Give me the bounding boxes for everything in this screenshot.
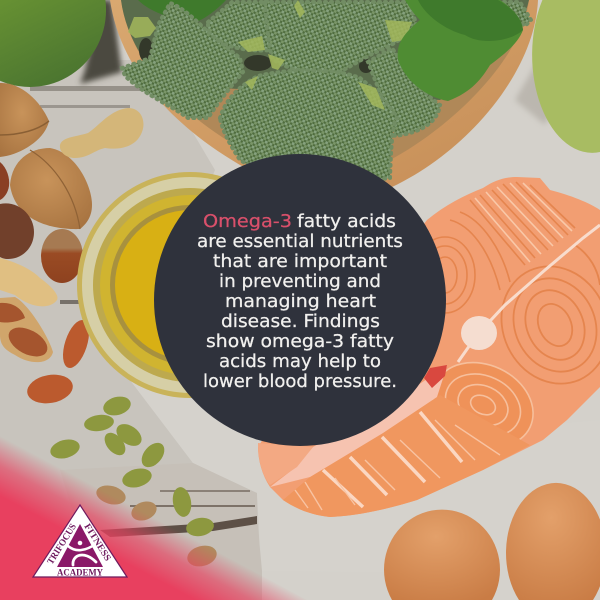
bowl of olive oil bbox=[77, 172, 303, 398]
callout text: are essential nutrients bbox=[197, 231, 403, 252]
callout text: Omega-3 bbox=[203, 211, 292, 232]
spinach leaf highlight bbox=[418, 0, 523, 41]
circle background bbox=[154, 154, 446, 446]
hazelnut bbox=[41, 229, 83, 283]
salmon body bbox=[258, 177, 600, 517]
callout text: managing heart bbox=[225, 291, 376, 312]
broccoli floret: left bbox=[122, 3, 243, 118]
callout text: that are important bbox=[213, 251, 387, 272]
salmon steak bbox=[258, 177, 600, 517]
salmon top muscle stripes bbox=[415, 182, 575, 313]
logo figure bbox=[68, 541, 97, 565]
logo text: ACADEMY: ACADEMY bbox=[57, 568, 103, 578]
logo text: TRIFOCUS: TRIFOCUS bbox=[46, 522, 79, 567]
olive oil bbox=[115, 210, 265, 360]
spinach leaf: right bbox=[398, 0, 523, 101]
logo: Trifocus Fitness Academy bbox=[33, 505, 127, 578]
logo triangle bbox=[33, 505, 127, 577]
walnut: top left bbox=[0, 83, 49, 157]
pumpkin seeds bbox=[48, 394, 219, 570]
callout text: fatty acids bbox=[297, 211, 396, 232]
open peanut shell bbox=[0, 297, 53, 362]
salmon right muscle swirls bbox=[483, 245, 600, 401]
logo inner triangle bbox=[57, 524, 103, 567]
logo text: FITNESS: FITNESS bbox=[81, 522, 112, 563]
callout text: acids may help to bbox=[219, 351, 381, 372]
salmon spine bbox=[458, 225, 600, 362]
broccoli florets bbox=[122, 2, 531, 190]
almonds bbox=[25, 317, 94, 407]
salmon top fat lines bbox=[475, 183, 572, 262]
broccoli stems and highlights bbox=[128, 0, 412, 110]
broccoli floret: top centre bbox=[265, 2, 416, 72]
eggs bbox=[384, 483, 600, 600]
wooden bowl bbox=[110, 0, 538, 192]
peanut: top bbox=[60, 108, 143, 158]
walnut: centre bbox=[10, 148, 92, 229]
salmon bottom ribs bbox=[283, 395, 530, 517]
salmon dark patch bbox=[424, 365, 447, 388]
salmon lower swirl bbox=[419, 347, 547, 463]
broccoli floret: top right bbox=[498, 2, 531, 26]
avocado bbox=[0, 0, 106, 87]
callout text: show omega-3 fatty bbox=[206, 331, 394, 352]
salmon belly flesh bbox=[270, 366, 447, 487]
spinach leaf: top left bbox=[138, 0, 226, 23]
peanut kernels bbox=[0, 303, 52, 362]
pink corner gradient bbox=[0, 435, 307, 600]
callout text: lower blood pressure. bbox=[203, 371, 397, 392]
callout text bbox=[197, 211, 403, 392]
nuts bbox=[0, 83, 143, 407]
broccoli floret: right bbox=[368, 48, 440, 136]
salmon left flap bbox=[258, 443, 313, 485]
pear bbox=[532, 0, 600, 153]
broccoli floret: back left bbox=[208, 2, 272, 50]
salmon backbone bbox=[461, 316, 497, 350]
broccoli floret: centre bbox=[220, 70, 397, 190]
chestnut bbox=[0, 203, 34, 259]
dark circle callout bbox=[154, 154, 446, 446]
callout text: in preventing and bbox=[219, 271, 381, 292]
broccoli and spinach bbox=[122, 0, 531, 190]
hazelnut: left edge bbox=[0, 162, 9, 200]
callout text: disease. Findings bbox=[221, 311, 380, 332]
peanut: left bbox=[0, 258, 58, 306]
